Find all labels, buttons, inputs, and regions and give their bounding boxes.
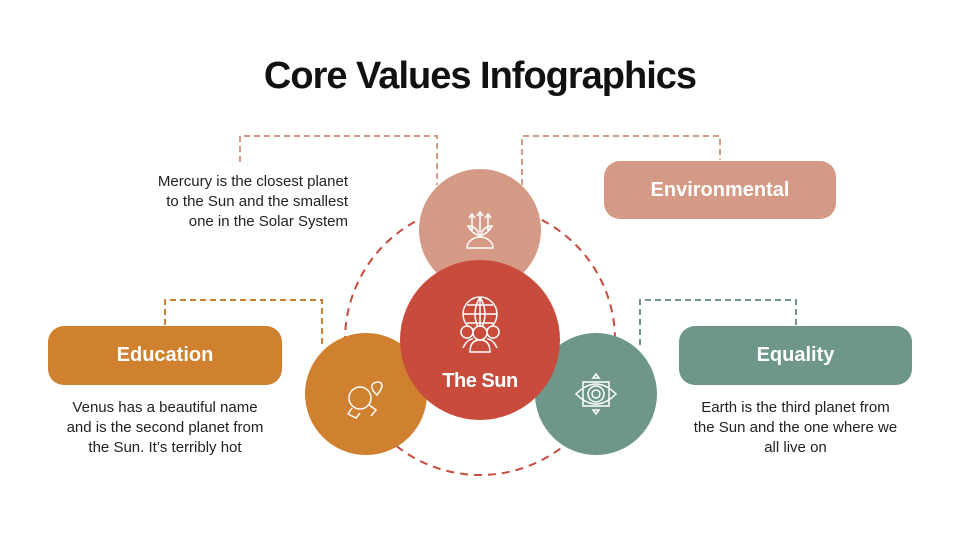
pill: education [48,326,282,385]
text: earth: the Sun and the one where we [694,419,897,436]
circle: equality [535,333,657,455]
circle: the sun: The Sun [442,370,518,392]
connectors [165,136,796,345]
text: earth: Earth is the third planet from [701,399,890,416]
text: venus: the Sun. It’s terribly hot [88,439,242,456]
text: mercury: Mercury is the closest planet [158,173,348,190]
text: venus: and is the second planet from [67,419,263,436]
circle: the sun [400,260,560,420]
text: mercury: one in the Solar System [189,213,348,230]
dashed ring [345,205,615,475]
pill: environmental: Environmental [651,178,789,200]
text: earth: all live on [764,439,827,456]
pill: equality [679,326,912,385]
text: mercury: to the Sun and the smallest [166,193,348,210]
pill: equality: Equality [757,344,834,366]
pill: education: Education [117,344,213,366]
text: venus [67,399,263,456]
text: venus: Venus has a beautiful name [72,399,258,416]
title: Core Values Infographics [264,55,696,97]
text: mercury [158,173,348,230]
pill: environmental [604,161,836,219]
circle: environmental [419,169,541,291]
circle: education [305,333,427,455]
text: earth [694,399,897,456]
